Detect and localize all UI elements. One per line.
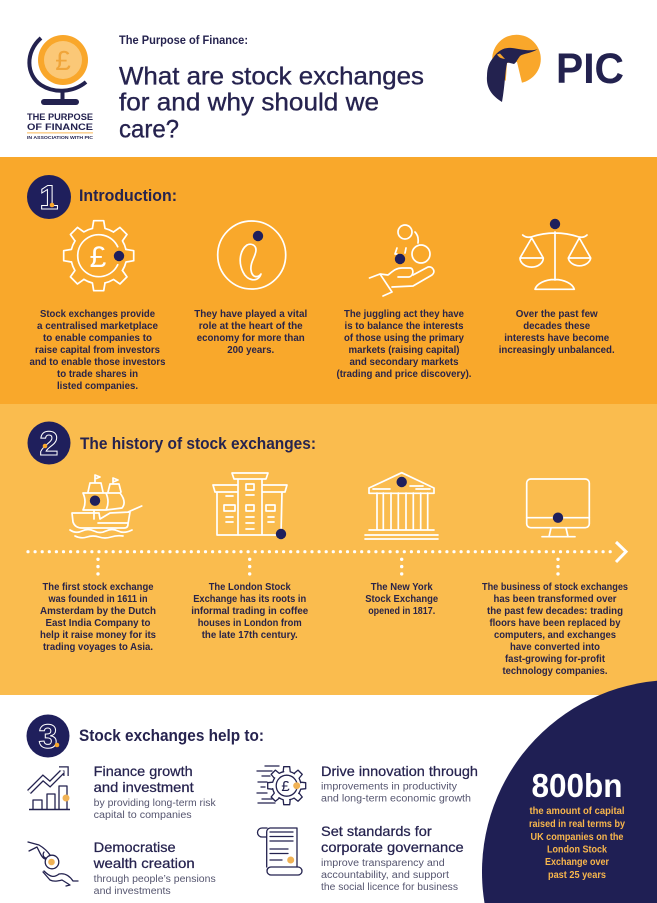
text: vital role: They have played a vital [194,309,307,320]
text: finance growth: capital to companies [94,810,192,821]
callout description: past 25 years [548,870,606,881]
text: finance growth: Finance growth [94,763,193,779]
text: finance growth: by providing long-term risk [94,798,217,809]
text: finance growth: and investment [94,779,194,795]
text: centralised marketplace: and to enable those investors [30,357,166,368]
text: vital role: 200 years. [227,345,274,356]
icon: hands and coin [28,842,78,886]
title: care? [119,116,179,144]
heading: introduction: Introduction: [79,186,177,205]
text: transformed business: technology companies. [502,666,608,677]
text: vital role [194,309,307,356]
text: transformed business: has been transformed over [494,594,617,605]
logo: The Purpose of Finance [27,35,94,140]
text: democratise wealth creation: and investments [94,886,171,897]
logo: The Purpose of Finance: £ [55,45,71,76]
icon: juggling hand [370,225,434,296]
text: Amsterdam 1611: The first stock exchange [42,582,154,593]
heading: stock exchanges help to: Stock exchanges help to: [79,726,264,745]
callout description: London Stock [547,844,607,856]
logo: The Purpose of Finance: OF FINANCE [27,122,93,133]
icon: growth chart [29,769,70,810]
text: centralised marketplace: a centralised marketplace [37,321,158,332]
logo: The Purpose of Finance: IN ASSOCIATION WITH PIC [27,135,94,140]
panel: history [0,404,657,695]
text: vital role: economy for more than [197,333,305,344]
text: New York Stock Exchange: Stock Exchange [365,594,439,605]
kicker heading: The Purpose of Finance: [119,35,248,47]
text: drive innovation [321,763,478,804]
text: democratise wealth creation: through people’s pensions [94,874,216,885]
text: Amsterdam 1611: help it raise money for its [40,630,156,641]
text: corporate governance [321,823,464,893]
title: for and why should we [119,88,379,116]
text: transformed business: The business of stock exchanges [482,582,628,593]
text: drive innovation: Drive innovation through [321,763,478,779]
text: New York Stock Exchange [365,582,439,617]
text: centralised marketplace [30,309,166,392]
header [27,35,624,144]
text: corporate governance: corporate governance [321,839,464,855]
text: London Stock Exchange: The London Stock [209,582,291,593]
text: increasingly unbalanced: increasingly unbalanced. [499,345,615,356]
text: corporate governance: accountability, and support [321,870,449,881]
text: juggling act: and secondary markets [350,357,459,368]
text: transformed business: floors have been replaced by [490,618,621,629]
text: increasingly unbalanced: Over the past few [516,309,598,320]
text: democratise wealth creation [93,839,216,897]
icon: speeding gear: £ [281,778,290,795]
icon: pound gear [63,220,134,291]
text: democratise wealth creation: Democratise [94,839,176,855]
text: transformed business [482,582,628,677]
callout description: the amount of capital [530,806,625,817]
text: increasingly unbalanced [499,309,615,356]
icon: information [218,221,286,289]
text: New York Stock Exchange: The New York [371,582,433,593]
text: drive innovation: and long-term economic growth [321,794,471,804]
text: centralised marketplace: listed companies. [57,381,138,392]
text: Amsterdam 1611 [40,582,156,653]
text: Amsterdam 1611: East India Company to [46,618,150,629]
number badge 1: 1 [40,179,58,217]
text: London Stock Exchange: houses in London from [198,618,302,629]
callout description: Exchange over [545,857,609,868]
icon: stock exchange building [365,473,438,539]
text: centralised marketplace: Stock exchanges provide [40,309,155,320]
callout: 800bn [482,681,657,903]
text: corporate governance: improve transparency and [321,858,445,869]
text: juggling act [336,309,472,380]
callout description [529,806,625,881]
text: Amsterdam 1611: trading voyages to Asia. [43,642,153,653]
text: corporate governance: Set standards for [321,823,432,839]
text: centralised marketplace: to enable companies to [43,333,152,344]
icon: building [213,473,287,539]
text: transformed business: computers, and exchanges [494,630,616,641]
text: transformed business: fast-growing for-profit [505,654,606,665]
number badge 1 [27,175,71,219]
text: vital role: role at the heart of the [199,321,303,332]
number badge 3 [26,714,70,758]
text: transformed business: have converted into [510,642,600,653]
number badge 2 [28,422,70,464]
logo: PIC penguin: PIC [556,45,624,93]
text: increasingly unbalanced: decades these [523,321,591,332]
number badge 3: 3 [39,718,57,756]
text: transformed business: the past few decades: trading [487,606,623,617]
text: New York Stock Exchange: opened in 1817. [368,606,435,617]
text: drive innovation: improvements in productivity [321,782,457,792]
text: increasingly unbalanced: interests have become [504,333,610,344]
text: London Stock Exchange [191,582,309,641]
text: London Stock Exchange: the late 17th century. [202,630,298,641]
icon: scroll document [258,828,302,875]
icon: ship [70,475,142,538]
text: juggling act: of those using the primary [344,333,464,344]
text: juggling act: The juggling act they have [344,309,464,320]
text: juggling act: is to balance the interests [344,321,464,332]
callout description: raised in real terms by [529,819,625,830]
icon: speeding gear [257,766,306,805]
icon: balance scales [520,219,591,289]
text: centralised marketplace: to trade shares in [57,369,138,380]
title: What are stock exchanges [119,62,424,90]
text: juggling act: (trading and price discovery). [336,369,472,380]
logo: The Purpose of Finance: THE PURPOSE [27,112,93,123]
heading: history: The history of stock exchanges: [80,434,316,453]
text: London Stock Exchange: Exchange has its roots in [193,594,306,605]
logo: PIC penguin [487,35,624,102]
text: Amsterdam 1611: was founded in 1611 in [48,594,147,605]
text: finance growth [94,763,217,821]
title [119,62,424,144]
timeline arrow [28,542,626,575]
number badge 2: 2 [40,425,58,463]
text: corporate governance: the social licence for business [321,882,458,893]
text: democratise wealth creation: wealth creation [93,855,195,871]
callout description: UK companies on the [530,832,624,843]
icon: computer monitor [527,479,589,537]
panel: stock exchanges help to [0,695,657,903]
text: juggling act: markets (raising capital) [348,345,460,356]
big number: 800bn [532,767,622,804]
icon: pound gear: £ [90,241,107,274]
text: centralised marketplace: raise capital from investors [35,345,160,356]
text: London Stock Exchange: informal trading in coffee [191,606,309,617]
panel: introduction [0,157,657,404]
text: Amsterdam 1611: Amsterdam by the Dutch [40,606,156,617]
